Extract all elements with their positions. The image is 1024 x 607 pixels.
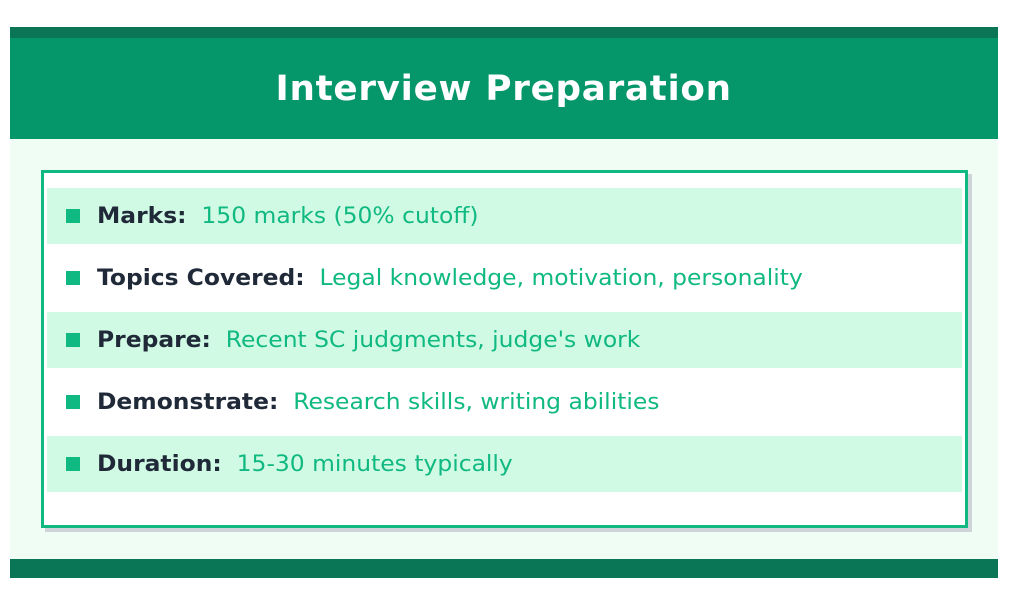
row: marks: Marks: 150 marks (50% cutoff): [97, 204, 479, 228]
title: Interview Preparation: [276, 68, 732, 108]
row: topics: Topics Covered: Legal knowledge, motivation, personality: [97, 266, 803, 290]
row: duration: Duration: 15-30 minutes typically: [97, 452, 513, 476]
row: marks: [47, 188, 962, 244]
panel background: [10, 139, 998, 560]
row: demonstrate: Demonstrate: Research skills, writing abilities: [97, 390, 659, 414]
panel: details box: [41, 170, 968, 528]
header: [10, 38, 998, 139]
top accent bar: [10, 27, 998, 38]
row: prepare: Prepare: Recent SC judgments, judge's work: [97, 328, 640, 352]
row: duration: [47, 436, 962, 492]
row: prepare: [47, 312, 962, 368]
bottom accent bar: [10, 559, 998, 578]
